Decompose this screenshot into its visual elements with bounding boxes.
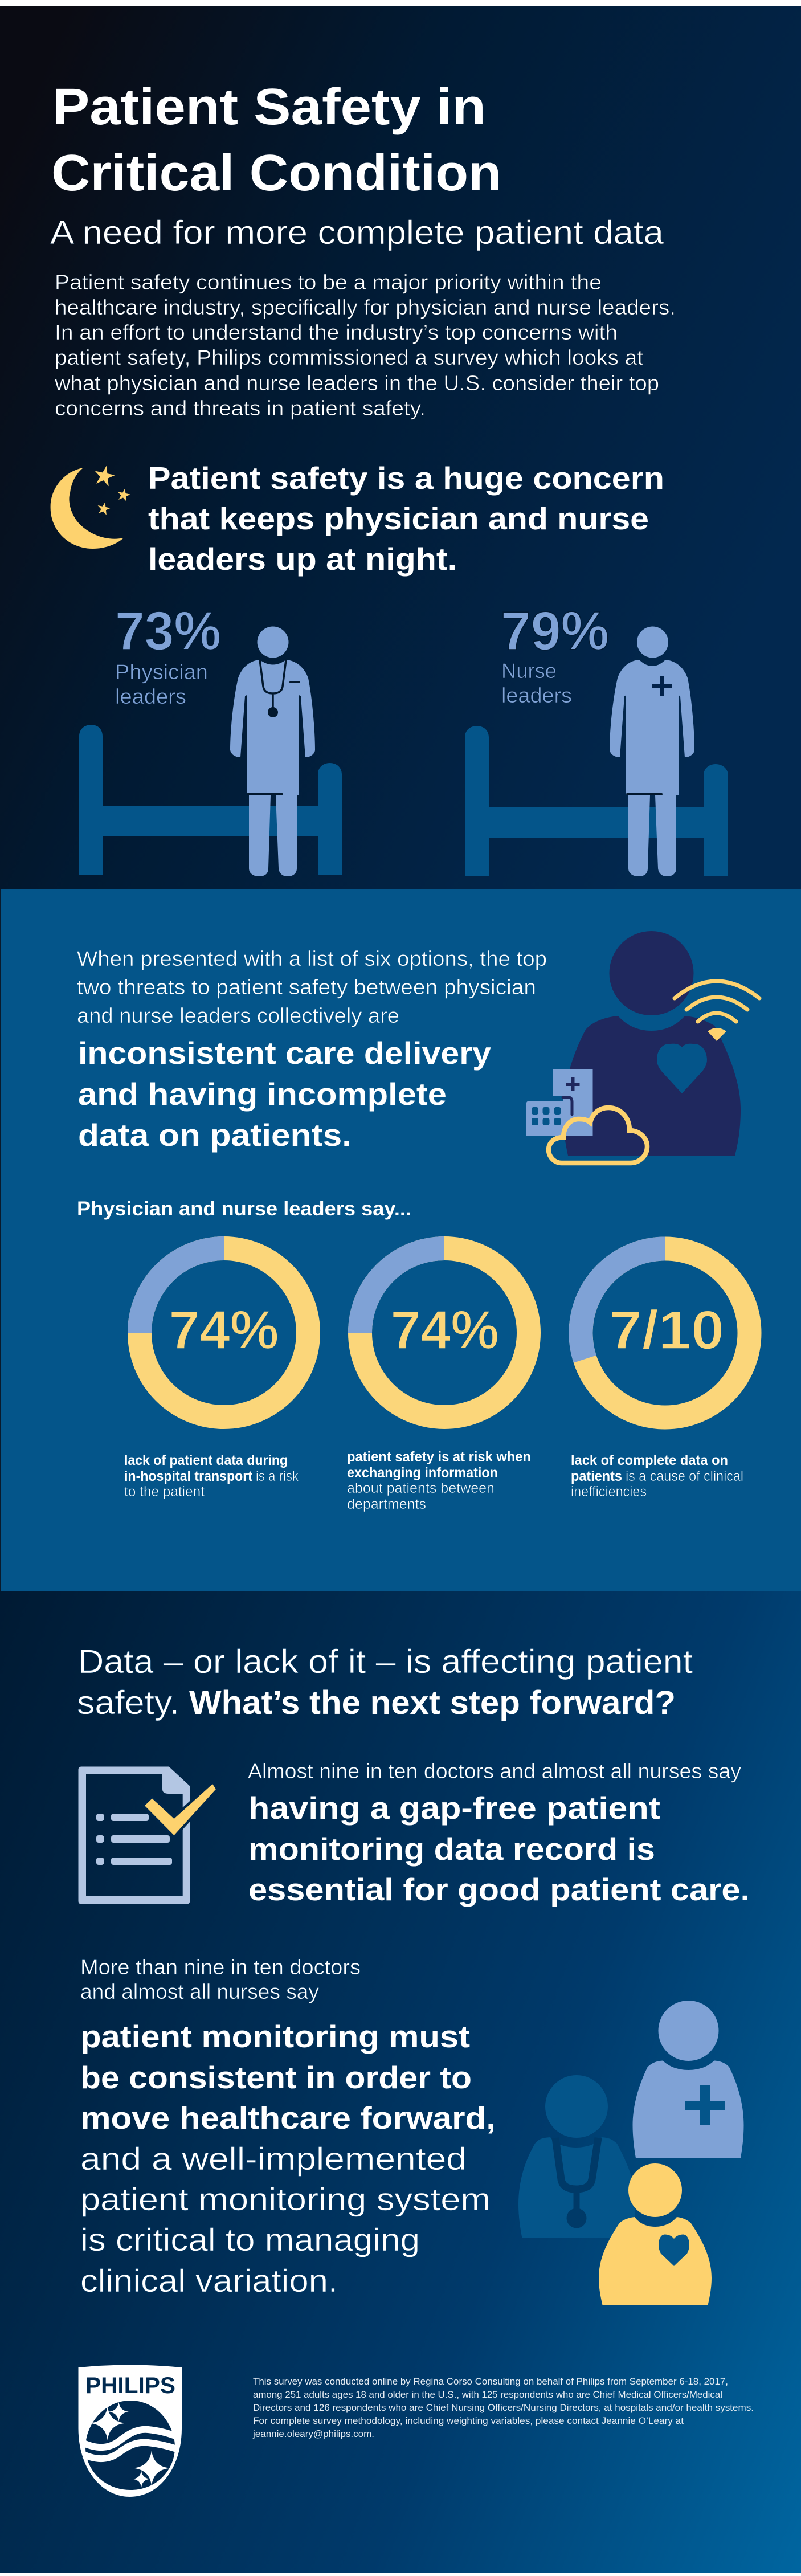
patient figure	[599, 2163, 712, 2305]
stat: 79% nurse leaders: leaders	[501, 684, 572, 707]
panel: top threats to patient safety	[0, 889, 801, 1591]
intro paragraph: Patient safety continues to be a major priority within the	[55, 271, 602, 294]
text: patient monitoring emphasis: clinical variation.	[80, 2263, 338, 2299]
donut chart: 74% exchanging information: 74%	[391, 1300, 499, 1361]
intro paragraph	[54, 271, 676, 420]
footnote: survey methodology: This survey was conducted online by Regina Corso Consulting on behalf of Philips from September 6-18, 2017,	[253, 2377, 728, 2387]
text: patient monitoring emphasis: is critical to managing	[80, 2222, 420, 2257]
caption: complete data: patients	[571, 1468, 622, 1484]
text: patient monitoring emphasis: and a well-implemented	[80, 2141, 467, 2177]
footnote: survey methodology: Directors and 126 respondents who are Chief Nursing Officers/Nursing Directors, at hospitals and/or health systems.	[253, 2403, 754, 2413]
icon: bed right	[465, 726, 728, 876]
stat: 73% physician leaders: leaders	[115, 685, 186, 708]
caption: in-hospital transport: in-hospital transport	[124, 1468, 253, 1484]
icon: patient with wifi, hospital and cloud	[526, 931, 759, 1163]
heading: next step forward: safety.	[77, 1684, 179, 1721]
heading: next step forward	[77, 1643, 693, 1721]
threats introduction text: When presented with a list of six options, the top	[77, 947, 547, 970]
subtitle: A need for more complete patient data	[50, 214, 664, 251]
caption: exchanging information: about patients between	[347, 1480, 495, 1496]
text: patient monitoring emphasis	[80, 2019, 496, 2299]
icon: bed left	[79, 725, 342, 875]
intro paragraph: healthcare industry, specifically for physician and nurse leaders.	[55, 296, 676, 319]
text: patient monitoring emphasis: move healthcare forward,	[80, 2100, 496, 2136]
icon: moon and stars	[51, 464, 132, 549]
threats emphasis text: data on patients.	[78, 1117, 352, 1153]
logo: Philips shield: PHILIPS	[85, 2373, 175, 2398]
text: gap-free data record intro: Almost nine in ten doctors and almost all nurses say	[248, 1759, 741, 1783]
donut chart: 74% in-hospital transport: 74%	[169, 1300, 279, 1361]
heading: physician and nurse leaders say: Physician and nurse leaders say...	[77, 1198, 411, 1220]
threats introduction text: and nurse leaders collectively are	[77, 1004, 399, 1027]
text: patient monitoring emphasis: be consistent in order to	[80, 2060, 472, 2095]
caption: exchanging information: departments	[347, 1496, 426, 1512]
stat: 79% nurse leaders: Nurse	[501, 659, 557, 683]
text: gap-free data record emphasis	[248, 1790, 750, 1907]
icon: nurse figure	[610, 627, 694, 876]
caption: in-hospital transport: lack of patient data during	[124, 1452, 288, 1468]
text: more than nine in ten doctors	[80, 1956, 361, 2003]
donut chart: 74% exchanging information	[360, 1248, 529, 1417]
heading: huge concern: leaders up at night.	[148, 541, 457, 577]
text: gap-free data record emphasis: having a gap-free patient	[248, 1790, 660, 1826]
footnote: survey methodology: among 251 adults ages 18 and older in the U.S., with 125 respondents who are Chief Medical Officers/Medical	[253, 2390, 722, 2400]
heading: huge concern: that keeps physician and nurse	[148, 501, 649, 536]
caption: complete data	[571, 1452, 743, 1500]
intro paragraph: In an effort to understand the industry’s top concerns with	[55, 321, 618, 344]
stat: 73% physician leaders: Physician	[115, 660, 208, 684]
panel: next step forward	[0, 1591, 801, 2573]
caption: complete data: inefficiencies	[571, 1484, 647, 1500]
stat: 79% nurse leaders: 79%	[501, 601, 609, 662]
title: Patient Safety in	[52, 79, 486, 136]
intro paragraph: patient safety, Philips commissioned a survey which looks at	[55, 346, 644, 369]
text: patient monitoring emphasis: patient monitoring must	[80, 2019, 470, 2054]
doctor figure	[518, 2075, 635, 2238]
nurse figure	[632, 2001, 744, 2158]
caption: in-hospital transport: is a risk	[256, 1468, 299, 1484]
caption: in-hospital transport	[124, 1452, 299, 1500]
stat: 73% physician leaders: 73%	[115, 601, 221, 662]
caption: exchanging information	[347, 1449, 531, 1512]
threats introduction text	[77, 947, 547, 1027]
stat: 73% physician leaders	[115, 601, 221, 708]
donut chart: 7/10 complete data	[581, 1249, 750, 1418]
intro paragraph: what physician and nurse leaders in the U.S. consider their top	[54, 372, 659, 395]
intro paragraph: concerns and threats in patient safety.	[55, 397, 426, 420]
donut chart: 7/10 complete data: 7/10	[609, 1300, 724, 1361]
text: more than nine in ten doctors: More than nine in ten doctors	[80, 1956, 361, 1979]
heading: huge concern: Patient safety is a huge concern	[148, 460, 664, 496]
heading: next step forward: What’s the next step forward?	[189, 1684, 676, 1721]
panel: introduction and night-time concern	[0, 6, 801, 889]
threats emphasis text	[78, 1035, 491, 1153]
title	[51, 79, 501, 202]
icon: physician figure	[230, 627, 315, 876]
caption: complete data: is a cause of clinical	[626, 1468, 743, 1484]
title: Critical Condition	[51, 145, 501, 202]
icon: care team	[518, 2001, 744, 2305]
footnote: survey methodology: jeannie.oleary@philips.com.	[252, 2429, 374, 2439]
caption: complete data: lack of complete data on	[571, 1452, 728, 1468]
logo: Philips shield	[79, 2365, 182, 2497]
threats introduction text: two threats to patient safety between physician	[77, 975, 536, 999]
text: gap-free data record emphasis: essential for good patient care.	[248, 1872, 750, 1907]
donut chart: 74% in-hospital transport	[140, 1248, 308, 1417]
caption: in-hospital transport: to the patient	[124, 1484, 205, 1500]
threats emphasis text: and having incomplete	[78, 1076, 447, 1112]
caption: exchanging information: exchanging information	[347, 1465, 498, 1481]
heading: huge concern	[148, 460, 664, 577]
icon: document with checkmark	[79, 1766, 216, 1904]
footnote: survey methodology: For complete survey methodology, including weighting variables, please contact Jeannie O’Leary at	[253, 2416, 684, 2426]
text: gap-free data record emphasis: monitoring data record is	[248, 1831, 655, 1867]
text: patient monitoring emphasis: patient monitoring system	[80, 2181, 491, 2217]
heading: next step forward: Data – or lack of it – is affecting patient	[78, 1643, 693, 1680]
caption: exchanging information: patient safety is at risk when	[347, 1449, 531, 1465]
threats emphasis text: inconsistent care delivery	[78, 1035, 491, 1071]
stat: 79% nurse leaders	[501, 601, 609, 707]
footnote: survey methodology	[252, 2377, 754, 2439]
text: more than nine in ten doctors: and almost all nurses say	[80, 1980, 319, 2003]
